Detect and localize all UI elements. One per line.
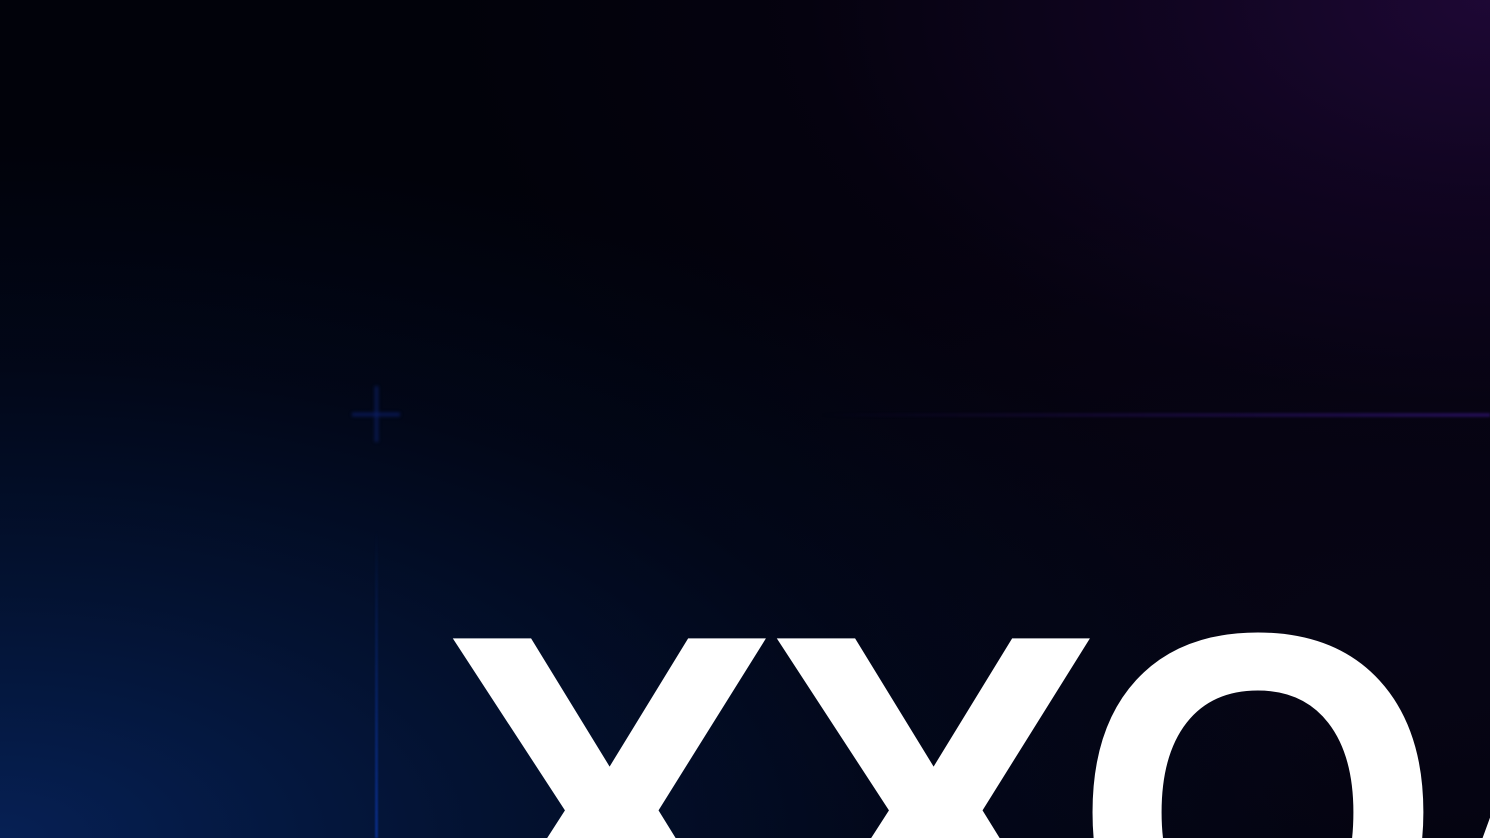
horizontal line (820, 413, 1490, 417)
cross marker (350, 385, 402, 443)
large title (438, 524, 1490, 838)
vertical line (375, 530, 378, 838)
